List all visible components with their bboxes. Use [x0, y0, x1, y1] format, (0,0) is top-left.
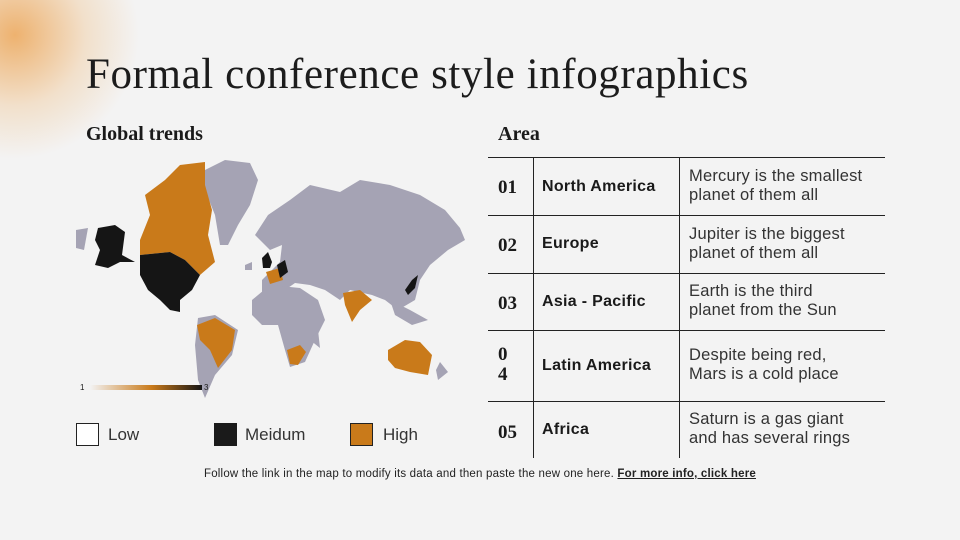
legend: [76, 423, 418, 446]
gradient scale: [80, 383, 208, 392]
legend: low: Low: [108, 425, 139, 444]
row 01: planet of them all: [689, 186, 818, 204]
row 05: Saturn is a gas giant: [689, 410, 844, 428]
row 02: Jupiter is the biggest: [689, 225, 845, 243]
heading: global trends: Global trends: [86, 123, 203, 145]
legend: high: [350, 423, 418, 446]
row 02: planet of them all: [689, 244, 818, 262]
row 03: [488, 273, 885, 331]
row 04: 0: [498, 344, 508, 365]
row 02: 02: [498, 235, 517, 256]
row 03: planet from the Sun: [689, 301, 837, 319]
footer note: Follow the link in the map to modify its data and then paste the new one here. For more info, click here: [204, 468, 756, 480]
row 04: Despite being red,: [689, 346, 827, 364]
decorative glow: [0, 0, 140, 160]
legend: medium: [214, 423, 305, 446]
gradient scale: 3: [204, 383, 208, 392]
legend: medium: Meidum: [245, 425, 305, 444]
row 05: and has several rings: [689, 429, 850, 447]
row 04: [488, 330, 885, 402]
row 01: [488, 157, 885, 216]
legend: low: [76, 423, 140, 446]
heading: area: Area: [498, 123, 540, 145]
row 05: Africa: [542, 421, 589, 438]
gradient scale: 1: [80, 383, 84, 392]
row 01: North America: [542, 178, 656, 195]
row 03: 03: [498, 293, 517, 314]
title: Formal conference style infographics: [86, 51, 749, 98]
row 05: 05: [498, 422, 517, 443]
row 01: 01: [498, 177, 517, 198]
row 02: [488, 215, 885, 274]
row 03: Earth is the third: [689, 282, 813, 300]
row 05: [488, 401, 885, 459]
row 02: Europe: [542, 235, 599, 252]
row 04: Latin America: [542, 357, 651, 374]
legend: high: High: [383, 425, 418, 444]
row 04: 4: [498, 364, 508, 385]
row 03: Asia - Pacific: [542, 293, 646, 310]
row 01: Mercury is the smallest: [689, 167, 862, 185]
row 04: Mars is a cold place: [689, 365, 839, 383]
